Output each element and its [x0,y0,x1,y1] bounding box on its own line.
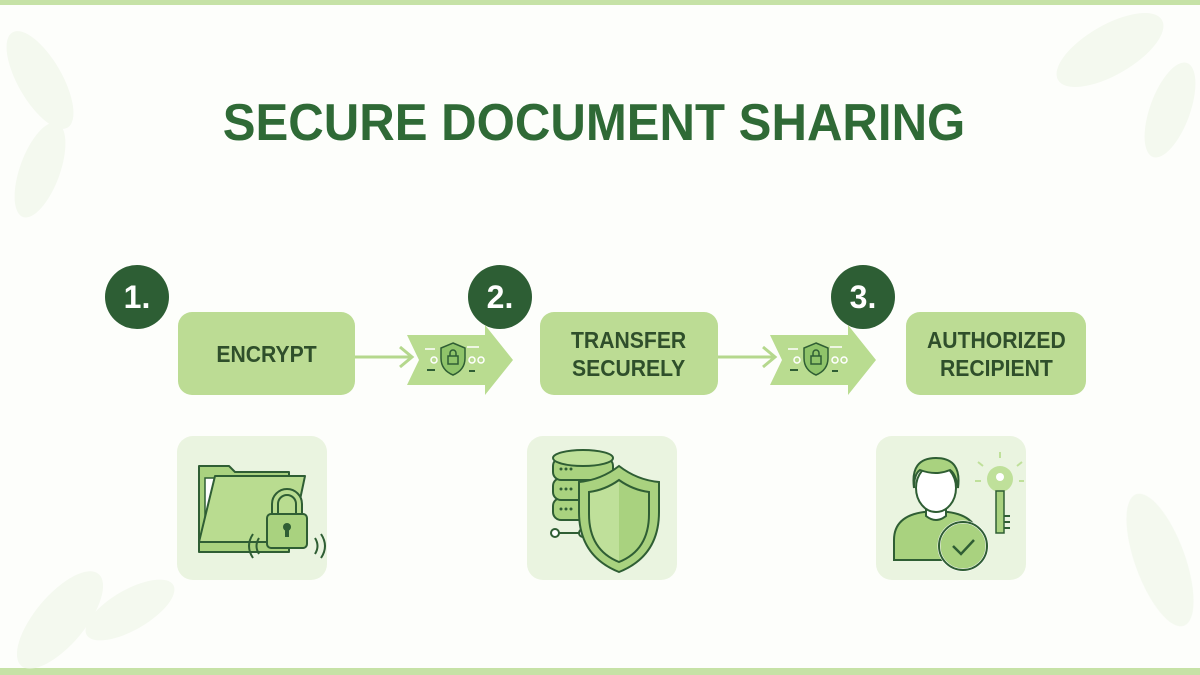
step 3 number: 3. [850,278,876,314]
tile: database shield icon [527,436,677,580]
step 2 number: 2. [487,278,513,314]
arrow 2 [718,325,876,395]
step 3 box [906,312,1086,395]
step 3 box: AUTHORIZED [927,326,1065,352]
step 2 box: TRANSFER [571,326,687,352]
tile: recipient with key icon [876,436,1026,580]
step 1 number [105,265,169,329]
step 2 box [540,312,718,395]
arrow 1 [355,325,513,395]
step 1 box: ENCRYPT [216,340,317,366]
step 2 box: SECURELY [572,354,686,380]
step 1 box [178,312,355,395]
step 3 box: RECIPIENT [940,354,1052,380]
step 2 number [468,265,532,329]
tile: folder lock icon [177,436,327,580]
top bar [0,0,1200,5]
step 1 number: 1. [124,278,150,314]
title: SECURE DOCUMENT SHARING [223,94,965,152]
step 3 number [831,265,895,329]
bottom bar [0,668,1200,675]
